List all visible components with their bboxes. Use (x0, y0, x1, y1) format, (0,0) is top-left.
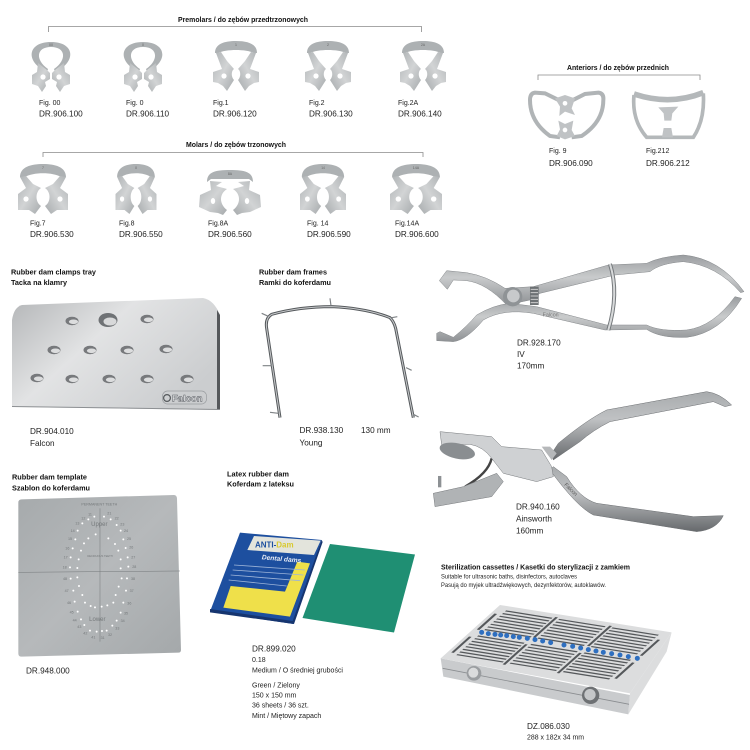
bracket: premolars (48, 26, 422, 32)
label: Fig. 2A: DR.906.140 (398, 110, 442, 118)
tooth numbers: 46 (67, 601, 71, 605)
label: Fig. 8A (208, 220, 252, 239)
clamp: Fig. 1: 1 (235, 43, 237, 47)
label: Fig. 212: Fig.212 (646, 148, 669, 155)
label: forceps code: DR.928.170 (517, 338, 561, 348)
clamp: Fig. 212 (634, 93, 704, 137)
box brand text (255, 540, 302, 565)
template words: DECIDUOUS TEETH (87, 554, 113, 558)
heading: template: Rubber dam template (12, 472, 87, 482)
heading: sterilization cassettes: Sterilization cassettes / Kasetki do sterylizacji z zamkiem (441, 562, 630, 572)
label: Fig. 7 (30, 220, 74, 239)
label: latex details: Green / Zielony (252, 682, 300, 690)
tooth numbers: 43 (77, 625, 81, 629)
label: Fig. 2A (398, 100, 442, 118)
clamp: Fig. 7: 7 (42, 166, 44, 170)
label: latex details: Medium / O średniej grubości (252, 668, 343, 674)
label: cassette code (527, 722, 584, 742)
heading: frames: Rubber dam frames (259, 268, 327, 276)
label: Fig. 14A (395, 220, 439, 239)
lock knobs (467, 666, 599, 704)
label: Fig. 14 (307, 220, 351, 239)
heading: clamps tray (11, 268, 97, 287)
tooth numbers: 35 (124, 611, 128, 615)
clamp: Fig. 14: 14 (321, 166, 325, 170)
clamp: Fig. 8A: 8A (228, 172, 233, 176)
heading: anteriors: Anteriors / do zębów przednich (567, 63, 669, 72)
heading: sterilization cassettes: Suitable for ultrasonic baths, disinfectors, autoclaves (441, 574, 578, 580)
label: frame code: 130 mm (361, 426, 391, 435)
tooth numbers: 48 (63, 577, 67, 581)
label: frame code: DR.938.130 (300, 426, 344, 435)
tooth numbers: 12 (81, 516, 85, 520)
label: latex details: Mint / Miętowy zapach (252, 713, 321, 720)
label: forceps code: 170mm (517, 362, 544, 370)
label: Fig. 8: Fig.8 (119, 220, 135, 228)
label: tray code: Falcon (30, 439, 55, 448)
clamp: Fig. 8A (199, 170, 261, 215)
label: pliers code: Ainsworth (516, 514, 552, 524)
clamp: Fig. 9 (530, 93, 603, 139)
tooth numbers: 37 (130, 589, 134, 593)
clamp: Fig. 00 (32, 42, 70, 92)
label: Fig. 2: DR.906.130 (309, 110, 353, 118)
tooth numbers: 44 (73, 618, 77, 622)
label: Fig. 00 (39, 100, 83, 118)
tooth numbers: 28 (132, 565, 136, 569)
logo: Falcon (162, 391, 206, 404)
green latex sheet (302, 544, 415, 632)
label: latex details (252, 644, 343, 720)
tooth numbers: 41 (91, 635, 95, 639)
label: Fig. 00: Fig. 00 (39, 100, 61, 107)
rubber dam forceps IV (437, 255, 744, 342)
tooth numbers: 31 (101, 636, 105, 640)
clamp: Fig. 2A: 2A (421, 43, 426, 47)
tooth numbers: 16 (65, 546, 69, 550)
label: tray code (30, 427, 74, 448)
template illustration (18, 495, 181, 657)
label: Fig. 7: DR.906.530 (30, 230, 74, 239)
tooth numbers: 14 (71, 529, 75, 533)
cassette illustration (441, 605, 672, 714)
punch holes (70, 517, 128, 632)
label: Fig. 14A: Fig.14A (395, 220, 419, 228)
tooth numbers: 22 (115, 516, 119, 520)
tooth numbers: 42 (83, 632, 87, 636)
clamp: Fig. 14A: 14A (413, 166, 420, 170)
clamp: Fig. 00: 00 (49, 43, 53, 47)
heading: premolars: Premolars / do zębów przedtrzonowych (178, 15, 308, 24)
label: Fig. 8A: Fig.8A (208, 220, 229, 228)
clamp: Fig. 0 (124, 42, 162, 92)
logo: Falcon small: Falcon (543, 313, 559, 319)
tooth numbers: 36 (127, 602, 131, 606)
label: Fig. 1 (213, 100, 257, 118)
label: cassette code: 288 x 182x 34 mm (527, 734, 584, 742)
heading: template: Szablon do koferdamu (12, 484, 90, 492)
label: Fig. 2: Fig.2 (309, 100, 325, 107)
tooth numbers: 47 (65, 589, 69, 593)
heading: latex dam: Latex rubber dam (227, 470, 289, 478)
heading: frames (259, 268, 331, 287)
heading: latex dam (227, 470, 294, 488)
label: frame code (300, 426, 391, 448)
template words: PERMANENT TEETH (81, 503, 118, 507)
label: Fig. 2A: Fig.2A (398, 100, 419, 107)
box brand text: Dental dams (261, 554, 302, 565)
punch pliers Ainsworth (433, 392, 732, 532)
template words: Lower (89, 617, 105, 623)
tooth numbers: 23 (120, 522, 124, 526)
label: latex details: 36 sheets / 36 szt. (252, 702, 309, 710)
label: Fig. 14A: DR.906.600 (395, 230, 439, 239)
label: Fig. 7: Fig.7 (30, 220, 46, 228)
tooth numbers: 45 (70, 611, 74, 615)
clamp: Fig. 14A (390, 164, 442, 214)
tooth numbers: 26 (129, 546, 133, 550)
clamp: Fig. 2 (305, 41, 351, 91)
tooth numbers: 17 (64, 556, 68, 560)
tooth numbers: 27 (131, 555, 135, 559)
label: template code: DR.948.000 (26, 666, 70, 676)
clamp: Fig. 8: 8 (135, 166, 137, 170)
heading: clamps tray: Tacka na klamry (11, 278, 68, 287)
label: Fig. 14: Fig. 14 (307, 220, 329, 228)
label: Fig. 8: DR.906.550 (119, 230, 163, 239)
label: Fig. 00: DR.906.100 (39, 110, 83, 118)
heading: latex dam: Koferdam z lateksu (227, 480, 294, 488)
blue silicone strip (482, 632, 637, 658)
label: Fig. 0 (126, 100, 170, 118)
logo: Falcon vertical: Falcon (563, 482, 578, 498)
heading: sterilization cassettes: Pasują do myjek ultradźwiękowych, dezynfektorów, autoklawów. (441, 582, 606, 589)
label: latex details: 0.18 (252, 657, 266, 664)
template words (81, 503, 118, 623)
bracket: molars (43, 152, 423, 157)
tooth numbers: 24 (124, 529, 128, 533)
tooth numbers: 38 (131, 577, 135, 581)
tray illustration (12, 298, 220, 410)
clamp: Fig. 2: 2 (327, 43, 329, 47)
label: Fig. 1: Fig.1 (213, 100, 229, 107)
tooth numbers: 34 (121, 619, 125, 623)
logo: Falcon: Falcon (172, 394, 203, 404)
label: forceps code: IV (517, 350, 525, 359)
label: pliers code: 160mm (516, 526, 543, 536)
label: cassette code: DZ.086.030 (527, 722, 570, 731)
heading: molars: Molars / do zębów trzonowych (186, 140, 286, 149)
tooth numbers: 18 (63, 565, 67, 569)
label: Fig. 8 (119, 220, 163, 239)
label: Fig. 2 (309, 100, 353, 118)
clamp: Fig. 1 (213, 41, 259, 91)
label: latex details: 150 x 150 mm (252, 692, 297, 700)
label: latex details: DR.899.020 (252, 644, 296, 654)
tooth numbers: 33 (115, 627, 119, 631)
label: Fig. 8A: DR.906.560 (208, 230, 252, 239)
label: Fig. 14: DR.906.590 (307, 230, 351, 239)
tooth numbers: 11 (88, 513, 92, 517)
box brand text: ANTI-Dam (255, 540, 294, 549)
label: Fig. 212: DR.906.212 (646, 159, 690, 168)
label: Fig. 9: Fig. 9 (549, 148, 567, 155)
clamp: Fig. 14 (300, 164, 346, 214)
label: Fig. 0: Fig. 0 (126, 100, 144, 107)
label: Fig. 0: DR.906.110 (126, 110, 170, 118)
tooth numbers: 21 (107, 512, 111, 516)
heading: template (12, 472, 90, 492)
heading: clamps tray: Rubber dam clamps tray (11, 268, 97, 276)
heading: frames: Ramki do koferdamu (259, 278, 331, 287)
label: pliers code: DR.940.160 (516, 502, 560, 512)
tooth numbers: 15 (68, 537, 72, 541)
dental dams box (210, 533, 323, 624)
clamp: Fig. 2A (400, 41, 446, 91)
tooth numbers: 32 (108, 633, 112, 637)
clamp: Fig. 0: 0 (142, 43, 144, 47)
clamp: Fig. 8 (116, 164, 156, 214)
label: Fig. 212 (646, 148, 690, 168)
bracket: anteriors (538, 75, 700, 80)
label: Fig. 9 (549, 148, 593, 168)
tooth numbers (63, 512, 136, 640)
label: frame code: Young (300, 438, 323, 448)
frame illustration (262, 298, 419, 418)
label: tray code: DR.904.010 (30, 427, 74, 436)
label: forceps code (517, 338, 561, 370)
tooth numbers: 13 (75, 522, 79, 526)
heading: sterilization cassettes (441, 562, 630, 589)
label: Fig. 9: DR.906.090 (549, 159, 593, 168)
clamp: Fig. 7 (18, 164, 68, 214)
template words: Upper (91, 522, 107, 528)
label: Fig. 1: DR.906.120 (213, 110, 257, 118)
tooth numbers: 25 (127, 537, 131, 541)
label: pliers code (516, 502, 560, 536)
